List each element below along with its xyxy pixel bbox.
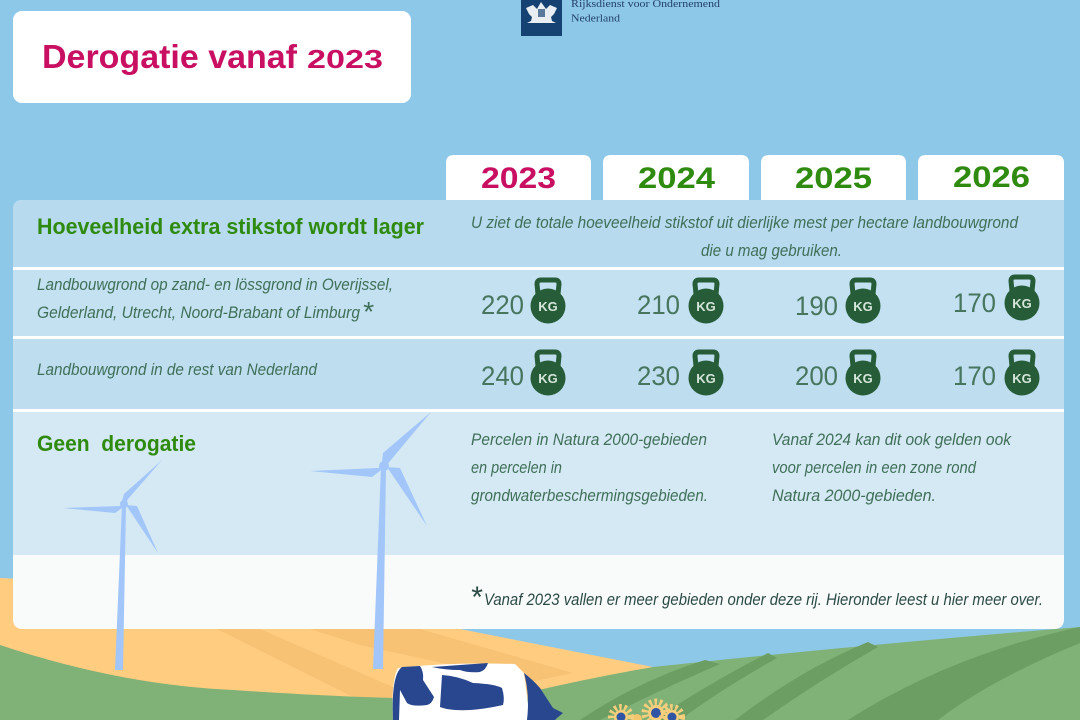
- value 170 kg: KG: [1012, 296, 1032, 311]
- value 170 kg: 170: [953, 288, 996, 318]
- text: vanaf 2024: Natura 2000-gebieden.: [772, 486, 936, 505]
- value 200 kg: [795, 352, 880, 396]
- value 220 kg: KG: [538, 299, 558, 314]
- row label: zand- en lössgrond: Landbouwgrond op zand- en lössgrond in Overijssel,: [37, 275, 393, 294]
- value 200 kg: KG: [853, 371, 873, 386]
- year tab 2023: [446, 155, 591, 200]
- value 190 kg: [795, 280, 880, 324]
- value 220 kg: [481, 280, 566, 324]
- row label: zand- en lössgrond: [37, 275, 393, 327]
- intro text: U ziet de totale hoeveelheid stikstof uit dierlijke mest per hectare landbouwgrond: [471, 213, 1018, 232]
- footnote: [470, 581, 1043, 614]
- value 240 kg: KG: [538, 371, 558, 386]
- sand field furrows: [217, 629, 573, 700]
- text: percelen natura 2000: en percelen in: [471, 458, 562, 477]
- panel: table background: [13, 200, 1064, 629]
- value 170 kg rest: [953, 352, 1040, 396]
- value 190 kg: KG: [853, 299, 873, 314]
- icon: sunflower 1: [611, 707, 631, 720]
- icon: sunflower 2: [645, 702, 667, 720]
- year tab 2024: 2024: [638, 162, 715, 195]
- landscape: [0, 578, 1080, 720]
- row label: rest van Nederland: Landbouwgrond in de rest van Nederland: [37, 360, 317, 379]
- year tab 2025: 2025: [795, 162, 872, 195]
- year tab 2026: [918, 155, 1064, 200]
- footnote: *: [470, 581, 483, 614]
- title: Derogatie vanaf: [42, 38, 298, 75]
- icon: cow: [393, 663, 563, 720]
- icon: sunflower small: [632, 714, 642, 720]
- text: vanaf 2024: voor percelen in een zone rond: [772, 458, 976, 477]
- text: vanaf 2024: Vanaf 2024 kan dit ook gelden ook: [772, 430, 1012, 449]
- intro text: [471, 213, 1018, 260]
- text: vanaf 2024: [772, 430, 1012, 505]
- icon: sunflower 3: [662, 707, 682, 720]
- heading: geen derogatie: Geen derogatie: [37, 431, 196, 456]
- value 240 kg: [481, 352, 566, 396]
- value 230 kg: 230: [637, 361, 680, 391]
- heading: hoeveelheid: Hoeveelheid extra stikstof wordt lager: [37, 214, 424, 239]
- sand field: [0, 578, 653, 720]
- row label: zand- en lössgrond: Gelderland, Utrecht, Noord-Brabant of Limburg: [37, 303, 360, 322]
- value 230 kg: KG: [696, 371, 716, 386]
- left green hill: [0, 645, 430, 720]
- value 210 kg: KG: [696, 299, 716, 314]
- title card: 2023: [307, 44, 383, 74]
- year tab 2024: [603, 155, 749, 200]
- row label: zand- en lössgrond: *: [362, 296, 374, 327]
- year tab 2025: [761, 155, 906, 200]
- logo: Rijksoverheid emblem: [521, 0, 562, 36]
- value 210 kg: [637, 280, 724, 324]
- text: percelen natura 2000: Percelen in Natura 2000-gebieden: [471, 430, 707, 449]
- value 170 kg rest: 170: [953, 361, 996, 391]
- wind turbine right: [310, 412, 431, 669]
- value 200 kg: 200: [795, 361, 838, 391]
- text: percelen natura 2000: [471, 430, 708, 505]
- value 230 kg: [637, 352, 724, 396]
- value 220 kg: 220: [481, 290, 524, 320]
- title card: [13, 11, 411, 103]
- value 190 kg: 190: [795, 291, 838, 321]
- text: percelen natura 2000: grondwaterbeschermingsgebieden.: [471, 486, 708, 505]
- wind turbine left: [63, 460, 162, 670]
- year tab 2026: 2026: [953, 161, 1030, 194]
- hill furrows: [580, 627, 1080, 720]
- value 170 kg rest: KG: [1012, 371, 1032, 386]
- year tab 2023: 2023: [481, 162, 556, 195]
- logo text: [571, 0, 721, 24]
- right green hill: [520, 627, 1080, 720]
- value 210 kg: 210: [637, 290, 680, 320]
- logo text: Nederland: [571, 12, 621, 24]
- value 170 kg: [953, 277, 1040, 320]
- value 240 kg: 240: [481, 361, 524, 391]
- intro text: die u mag gebruiken.: [701, 241, 842, 260]
